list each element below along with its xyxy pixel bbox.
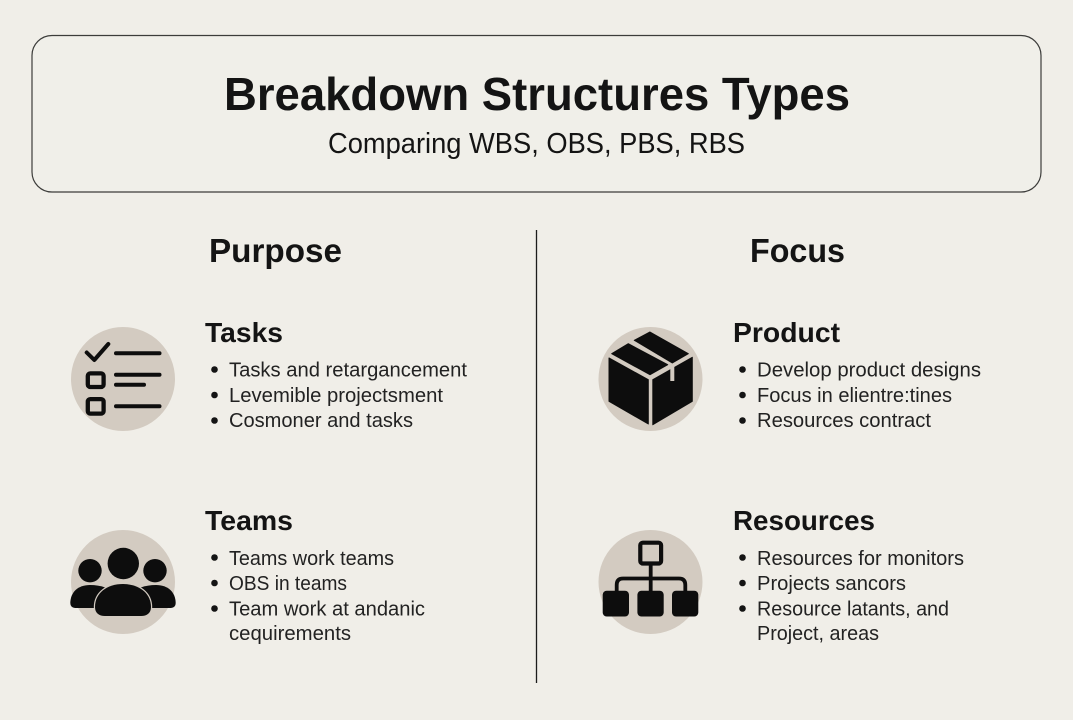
column divider	[536, 230, 538, 683]
icon: product box	[598, 327, 702, 431]
block: Teams	[205, 505, 425, 645]
block: Tasks: Cosmoner and tasks	[229, 410, 413, 432]
icon: task checklist	[71, 327, 175, 431]
block: Resources: Projects sancors	[757, 573, 906, 595]
block: Product: Product	[733, 317, 840, 348]
block: Product	[733, 317, 981, 432]
block: Product: Resources contract	[757, 410, 931, 432]
block: Tasks	[205, 317, 467, 432]
block: Resources: Project, areas	[757, 623, 879, 645]
title: Breakdown Structures Types	[224, 68, 850, 120]
block: Teams: Teams work teams	[229, 548, 394, 570]
subtitle: Comparing WBS, OBS, PBS, RBS	[328, 128, 745, 160]
heading: Purpose: Purpose	[209, 232, 342, 269]
block: Resources: Resource latants, and	[757, 598, 949, 620]
block: Teams: cequirements	[229, 623, 351, 645]
block: Tasks: Tasks and retargancement	[229, 360, 467, 382]
block: Product: Focus in elientre:tines	[757, 385, 952, 407]
block: Teams: Teams	[205, 505, 293, 536]
block: Resources	[733, 505, 964, 645]
block: Teams: Team work at andanic	[229, 598, 425, 620]
block: Product: Develop product designs	[757, 360, 981, 382]
heading: Focus: Focus	[750, 232, 845, 269]
icon: resource hierarchy	[598, 530, 702, 634]
block: Teams: OBS in teams	[229, 573, 347, 595]
block: Resources: Resources for monitors	[757, 548, 964, 570]
icon: team of people	[70, 530, 176, 634]
header panel	[32, 36, 1041, 192]
block: Resources: Resources	[733, 505, 875, 536]
block: Tasks: Tasks	[205, 317, 283, 348]
block: Tasks: Levemible projectsment	[229, 385, 443, 407]
